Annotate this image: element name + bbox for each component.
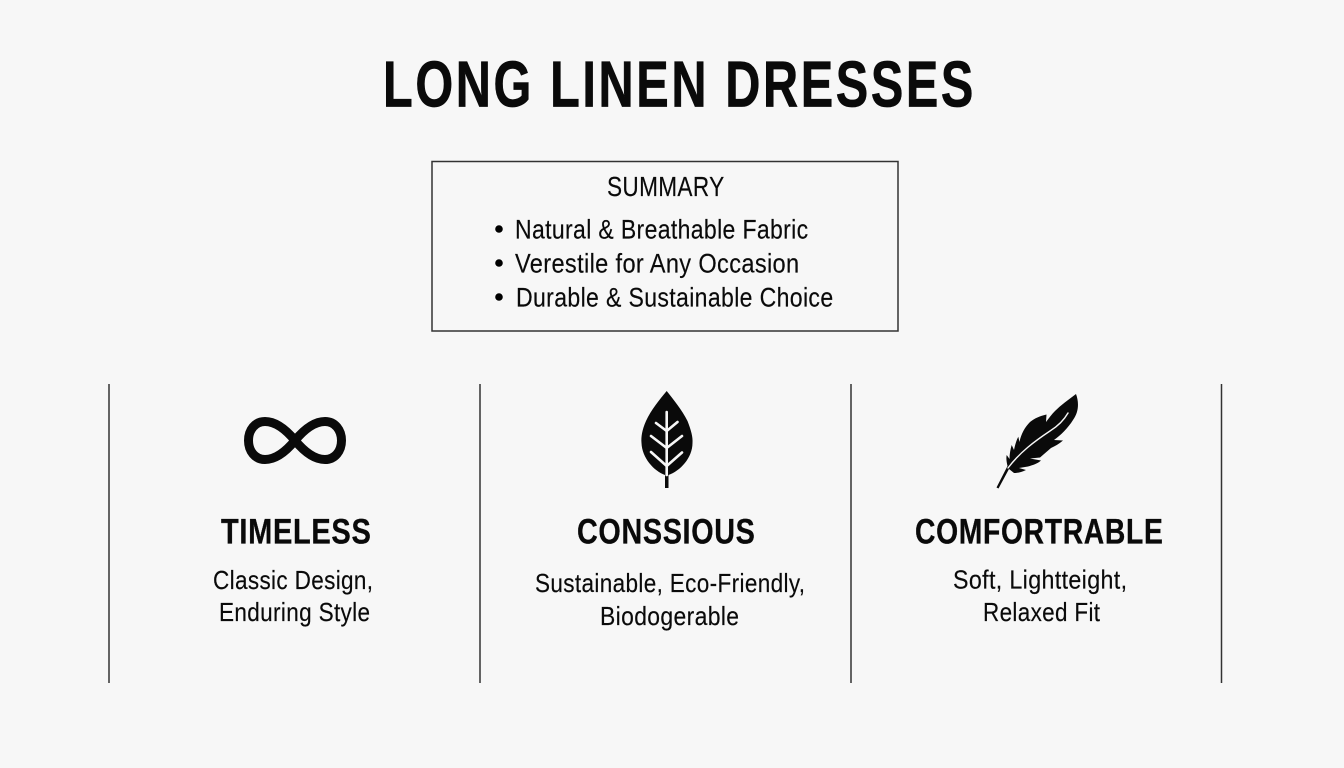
heading: comfortable: COMFORTRABLE xyxy=(915,512,1164,552)
icon: feather xyxy=(996,394,1078,488)
description: conscious: Sustainable, Eco-Friendly, xyxy=(535,568,805,598)
description: timeless: Classic Design, xyxy=(213,565,373,595)
description: comfortable xyxy=(953,564,1127,627)
description: conscious xyxy=(535,568,805,631)
panel: timeless xyxy=(213,422,373,627)
summary bullet list: Durable & Sustainable Choice xyxy=(516,282,834,312)
summary bullet list: Verestile for Any Occasion xyxy=(515,248,800,278)
panel: conscious xyxy=(535,391,805,631)
icon: infinity xyxy=(248,422,342,460)
description: comfortable: Soft, Lightteight, xyxy=(953,564,1127,594)
panel: summary xyxy=(432,162,898,331)
icon: leaf xyxy=(641,391,693,488)
summary bullet list: Natural & Breathable Fabric xyxy=(515,214,808,244)
title: LONG LINEN DRESSES xyxy=(383,48,976,120)
summary heading: SUMMARY xyxy=(607,171,724,202)
heading: conscious: CONSSIOUS xyxy=(577,512,756,552)
heading: timeless: TIMELESS xyxy=(221,512,372,552)
description: comfortable: Relaxed Fit xyxy=(983,597,1101,627)
summary bullet list xyxy=(495,214,834,312)
panel: comfortable xyxy=(915,394,1164,627)
description: conscious: Biodogerable xyxy=(600,601,739,631)
description: timeless: Enduring Style xyxy=(219,597,370,627)
description: timeless xyxy=(213,565,373,627)
